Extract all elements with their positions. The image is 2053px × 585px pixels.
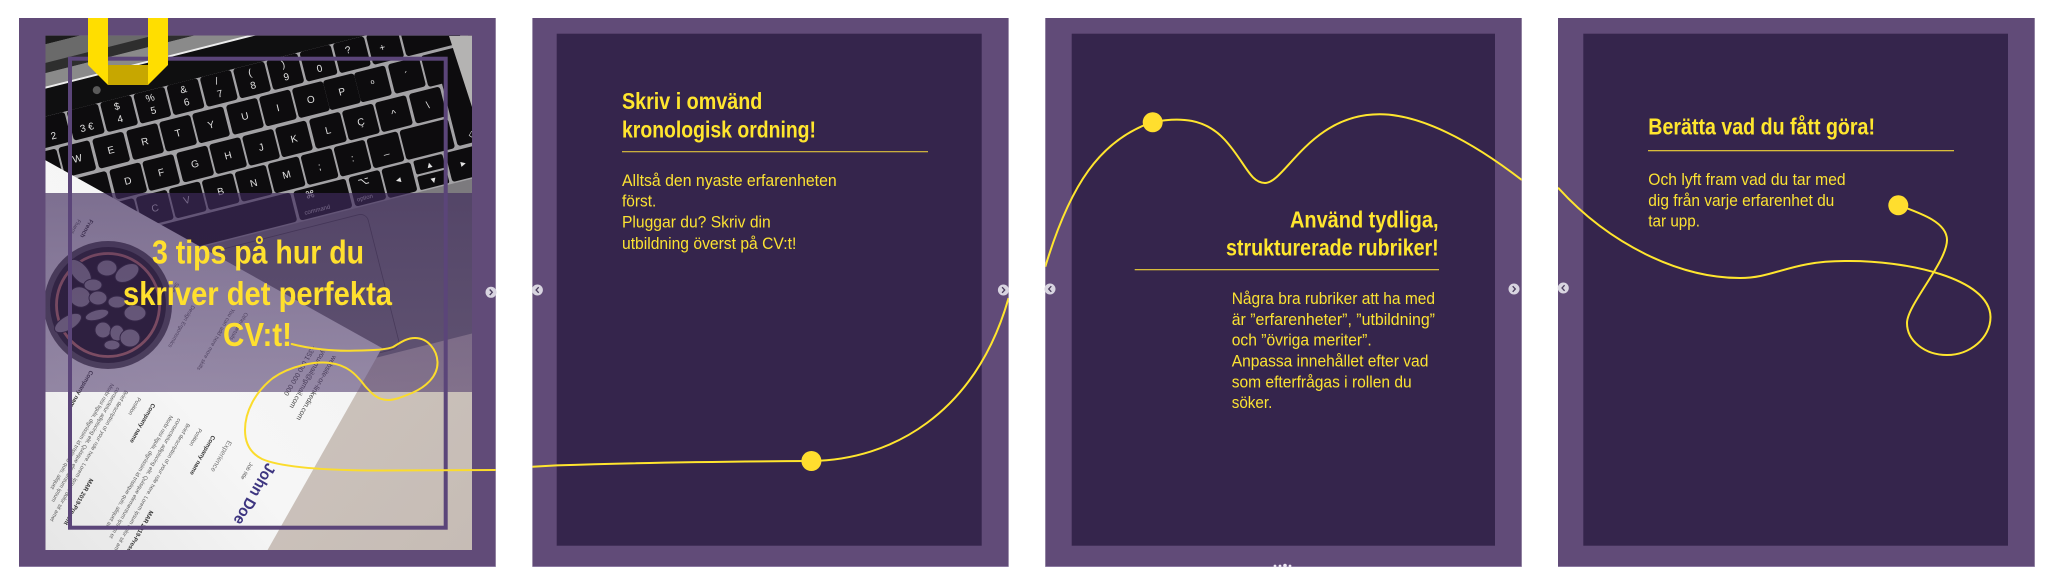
heading: tip 1: kronologisk ordning!	[622, 116, 816, 142]
key labels: F	[157, 167, 166, 179]
key labels: 7	[216, 88, 225, 101]
CV text on paper: Skills	[168, 281, 179, 295]
panel: cover with photo	[19, 18, 496, 567]
key labels: O	[306, 94, 316, 107]
CV text on paper: yourmail@gmail.com	[287, 349, 326, 409]
nav button: next	[998, 284, 1009, 296]
key labels: /	[214, 76, 220, 88]
nav button: next	[486, 287, 496, 298]
key labels: command	[304, 205, 331, 217]
key labels: º	[370, 79, 377, 90]
key labels: ◇	[467, 128, 478, 141]
key labels: %	[145, 92, 156, 105]
nav button: previous	[532, 284, 543, 296]
key labels: ?	[344, 45, 353, 57]
key labels: E	[107, 145, 116, 157]
plant pot	[44, 241, 172, 369]
key labels: 5	[150, 105, 158, 117]
CV text on paper: John Doe	[229, 460, 278, 527]
text block: tip 1: först.	[622, 192, 656, 211]
text block: tip 3: dig från varje erfarenhet du	[1648, 191, 1834, 210]
key labels: G	[190, 158, 200, 171]
key labels: 8	[249, 80, 258, 92]
CV text on paper: Design Ergonomics	[166, 304, 195, 349]
nav button: previous	[1044, 284, 1056, 294]
heading: tip 3: Berätta vad du fått göra!	[1648, 113, 1875, 139]
marker: dot tip 1	[801, 451, 821, 471]
key labels: \	[425, 100, 431, 112]
key labels: K	[290, 133, 299, 146]
text block: tip 1: utbildning överst på CV:t!	[622, 234, 796, 253]
text block: tip 2: söker.	[1232, 393, 1272, 412]
key labels: Y	[207, 119, 216, 132]
key labels: ◂	[395, 174, 402, 186]
CV text on paper: Fluent	[68, 218, 81, 235]
CV text on paper: Morbi nisi ligula, dignissim id tristique quis, aliquet	[48, 382, 114, 491]
CV text on paper: +351 000 000 000	[282, 344, 316, 397]
CV text on paper: Company name	[66, 369, 93, 411]
title: skriver det perfekta	[123, 275, 393, 312]
text block: tip 1: Alltså den nyaste erfarenheten	[622, 171, 837, 190]
key labels: H	[223, 150, 233, 163]
text block: tip 1: Pluggar du? Skriv din	[622, 213, 771, 232]
heading: tip 1: Skriv i omvänd	[622, 88, 762, 114]
text block: tip 3: Och lyft fram vad du tar med	[1648, 170, 1846, 189]
CV text on paper: Morbi nisi ligula, dignissim id tristique quis, aliquet at	[104, 414, 173, 528]
photo: laptop and CV on table	[46, 36, 472, 550]
CV text on paper: consectetur adipiscing elit. Quisque elementum ipsum et	[107, 417, 181, 540]
heading: tip 1	[622, 88, 816, 142]
key labels: J	[257, 142, 265, 154]
CV text on paper: Position	[126, 396, 141, 416]
key labels: 2	[50, 130, 58, 143]
key labels: C	[150, 203, 160, 215]
key labels: ⌥	[357, 175, 371, 189]
number row keys	[46, 36, 472, 246]
CV text on paper: Brief description of your role here. Lorem ipsum dolor sit amet	[110, 422, 190, 556]
panel: tip 1	[532, 18, 1009, 567]
key labels: ´	[404, 69, 410, 82]
key labels: N	[249, 178, 259, 190]
CV text on paper: Brief description of your role here. Lorem ipsum dolor sit amet	[48, 389, 128, 523]
CV text on paper: Company name	[128, 402, 155, 444]
CV text on paper: Company name	[188, 434, 215, 476]
key labels: ▾	[430, 175, 437, 187]
nav button: next	[1508, 284, 1520, 294]
title: 3 tips på hur du	[152, 233, 364, 270]
key labels: R	[140, 136, 150, 149]
key labels: ⌘	[304, 189, 317, 202]
heading: tip 2: Använd tydliga,	[1290, 206, 1438, 232]
key labels: )	[280, 59, 286, 71]
CV text on paper: Experience	[209, 439, 232, 473]
text block: tip 2: Några bra rubriker att ha med	[1232, 289, 1435, 308]
icon: yellow bookmark ribbon	[88, 18, 168, 85]
key labels: T	[174, 128, 183, 140]
key labels: Ç	[356, 117, 366, 129]
CV text on paper: website-or-linkedin.com	[294, 353, 338, 421]
key labels: ▴	[426, 159, 433, 171]
text block: tip 1	[622, 171, 837, 253]
CV text on paper: Job title	[239, 461, 253, 480]
key labels: 9	[283, 72, 291, 84]
CV text on paper: MAR 2019-Present	[62, 477, 93, 526]
key labels: _	[381, 144, 390, 157]
CV text on paper: Other details	[228, 311, 248, 341]
key labels: option	[356, 194, 374, 204]
CV text on paper: consectetur adipiscing elit. Quisque elementum ipsum	[49, 386, 120, 503]
key labels: P	[338, 86, 347, 99]
nav button: previous	[1558, 282, 1569, 294]
connecting yellow line across panels	[245, 114, 1990, 470]
title	[123, 233, 393, 353]
pagination dots	[1274, 564, 1291, 567]
heading: tip 2: strukturerade rubriker!	[1226, 235, 1439, 261]
marker: dot tip 3	[1888, 195, 1908, 215]
CV text on paper: You can add here more skills	[195, 307, 235, 371]
key labels: U	[240, 111, 250, 123]
CV text on paper: Position	[187, 427, 202, 447]
decorative inner frame	[70, 59, 446, 528]
key labels: &	[179, 84, 189, 96]
key labels: :	[350, 153, 355, 165]
CV text on paper: French	[78, 218, 93, 239]
text block: tip 2: är ”erfarenheter”, ”utbildning”	[1232, 310, 1435, 329]
text block: tip 3	[1648, 170, 1846, 231]
key labels: 3 €	[79, 121, 96, 135]
key labels: L	[324, 125, 333, 137]
key labels: 0	[316, 63, 324, 75]
key labels: ^	[390, 108, 398, 120]
key labels: (	[247, 68, 254, 79]
text block: tip 3: tar upp.	[1648, 212, 1700, 231]
key labels: M	[281, 169, 292, 182]
CV text on paper	[48, 218, 338, 558]
panel: tip 3	[1558, 18, 2035, 567]
key labels: +	[378, 42, 387, 54]
key labels: ▸	[460, 158, 467, 170]
key labels: I	[275, 103, 281, 114]
CV text on paper: MAR 2019-Present	[122, 509, 153, 558]
marker: dot tip 2	[1143, 112, 1163, 132]
text block: tip 2: Anpassa innehållet efter vad	[1232, 352, 1428, 371]
heading: tip 2	[1226, 206, 1439, 261]
text block: tip 2: som efterfrågas i rollen du	[1232, 372, 1412, 391]
title: CV:t!	[223, 316, 292, 353]
key labels: 4	[116, 114, 125, 126]
panel: tip 2	[1044, 18, 1522, 567]
key labels	[51, 45, 472, 215]
key labels: ;	[317, 162, 322, 173]
key labels: $	[113, 101, 122, 113]
key labels: B	[216, 186, 226, 198]
text block: tip 2	[1232, 289, 1435, 412]
text block: tip 2: och ”övriga meriter”.	[1232, 331, 1372, 350]
key labels: V	[182, 195, 192, 207]
key labels: 6	[183, 97, 191, 109]
key labels: W	[72, 153, 84, 166]
key labels: D	[123, 175, 133, 188]
